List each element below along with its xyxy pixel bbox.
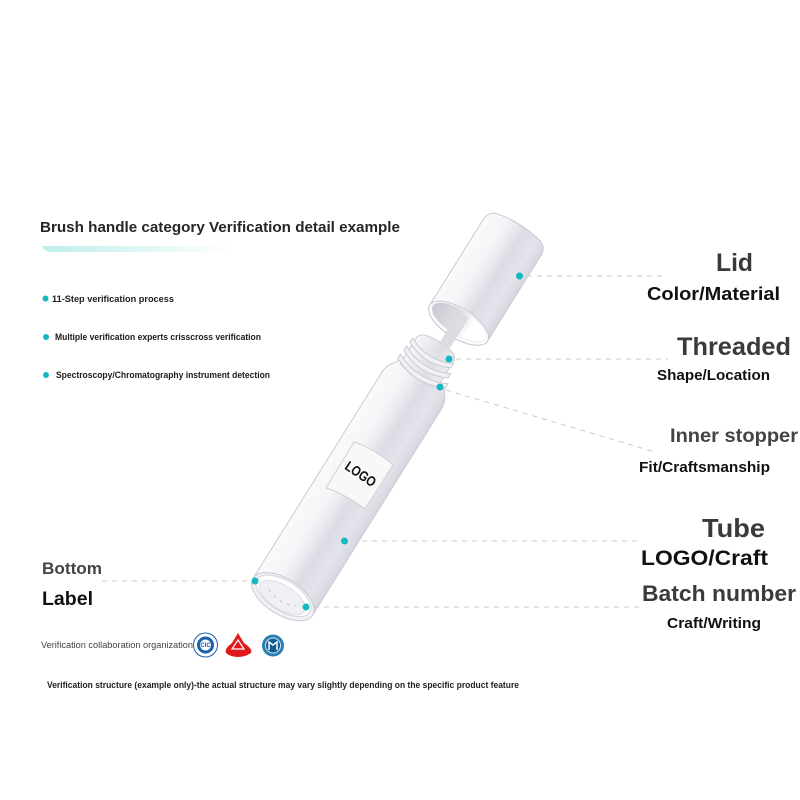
title underline gradient (42, 246, 232, 252)
callout: inner stopper (639, 426, 799, 476)
threaded neck (394, 328, 464, 394)
logo: blue round seal (262, 634, 284, 656)
callout: threaded: Threaded (677, 333, 791, 361)
callout: tube: Tube (702, 513, 765, 543)
callout: lid: Lid (716, 249, 753, 277)
logo: red drop triangle (226, 633, 251, 657)
callout: bottom label: Bottom (42, 559, 102, 578)
heading block (40, 219, 400, 252)
organization caption: Verification collaboration organization (41, 640, 193, 650)
bullet: multiple experts: Multiple verification experts crisscross verification (55, 332, 261, 342)
callout: batch number: Batch number (642, 581, 796, 606)
tube open bottom (244, 563, 322, 631)
callout: batch number: Craft/Writing (667, 615, 761, 632)
callout: bottom label: Label (42, 589, 93, 610)
lid (422, 207, 549, 354)
brush wand (440, 313, 468, 349)
logo: CIC seal: CIC (200, 643, 211, 649)
bullet: instrument detection: Spectroscopy/Chromatography instrument detection (56, 370, 270, 380)
logo label: LOGO (342, 458, 379, 490)
callout: inner stopper: Inner stopper (670, 426, 799, 447)
footnote: Verification structure (example only)-the actual structure may vary slightly depending on the specific product feature (47, 680, 519, 690)
logo: CIC seal (194, 633, 218, 657)
callout: inner stopper: Fit/Craftsmanship (639, 459, 770, 476)
callout: threaded: Shape/Location (657, 367, 770, 384)
tube body (244, 354, 453, 630)
logo label (326, 442, 393, 509)
callout leader lines (102, 276, 668, 607)
callout: lid: Color/Material (647, 284, 780, 304)
callout marker dots (252, 272, 523, 610)
product illustration: brush tube and lid (244, 207, 549, 631)
feature list (42, 294, 270, 380)
title: Brush handle category Verification detail example (40, 219, 400, 236)
bullet: 11-step process: 11-Step verification process (52, 294, 174, 304)
callout: batch number (642, 581, 796, 632)
callout: bottom label (42, 559, 102, 610)
callout: threaded (657, 333, 791, 384)
verification organizations row (41, 633, 284, 657)
callout: tube: LOGO/Craft (641, 547, 768, 570)
callout: lid (647, 249, 780, 304)
callout: tube (641, 513, 768, 570)
